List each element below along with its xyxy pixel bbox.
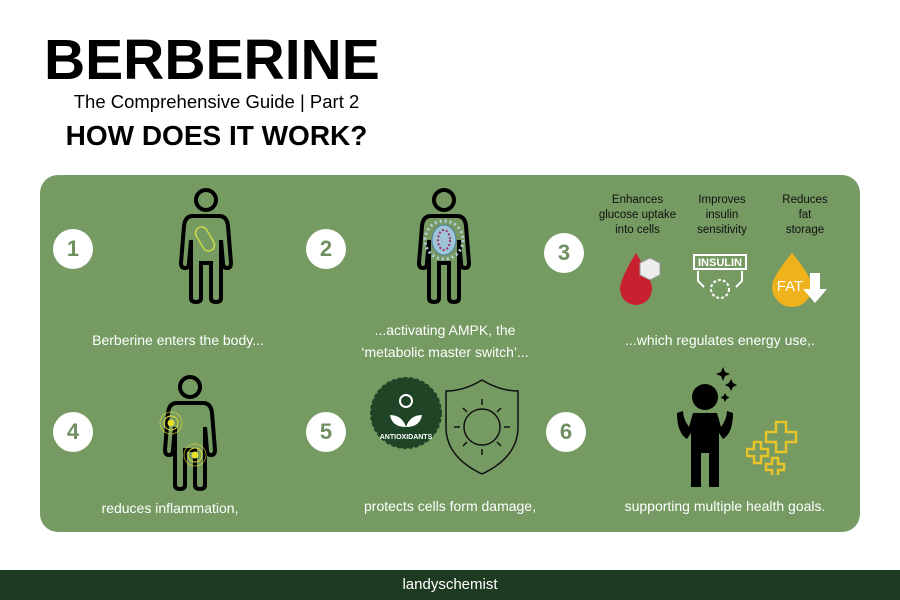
icon: insulin: INSULIN [698,257,742,269]
label: fat: fat [799,209,811,221]
step 6 number [546,412,586,452]
label: glucose [599,194,676,236]
step 6 number: 6 [560,419,572,444]
title: BERBERINE [44,28,380,92]
icon: blood drop with sugar cube [620,253,660,305]
icon: antioxidants badge: ANTIOXIDANTS [380,434,433,441]
label: insulin [697,194,747,236]
label: glucose: Enhances [612,194,663,206]
step 4 text: reduces inflammation, [102,500,238,516]
icon: happy person with sparkles [677,367,737,487]
subtitle: The Comprehensive Guide | Part 2 [74,91,359,112]
step 2 text: ...activating AMPK, the [375,322,515,338]
step 2 number [306,229,346,269]
step 6 text: supporting multiple health goals. [625,498,825,514]
label: fat: Reduces [782,194,828,206]
step 4 number: 4 [67,419,79,444]
icon: yellow crosses [746,420,798,475]
label: insulin: Improves [698,194,746,206]
label: glucose: glucose uptake [599,209,676,221]
step 3 text: ...which regulates energy use,. [625,332,815,348]
label: glucose: into cells [615,224,660,236]
step 4 number [53,412,93,452]
step 1 number [53,229,93,269]
step 5 number: 5 [320,419,332,444]
step 2 text [361,322,529,360]
icon: shield with virus [445,379,519,475]
footer [0,570,900,600]
panel: steps [40,175,860,532]
label: insulin: insulin [706,209,738,221]
icon: fat drop: FAT [777,278,803,295]
step 3 sub-labels [599,194,828,307]
label: fat: storage [786,224,824,236]
step 3 number: 3 [558,240,570,265]
icon: antioxidants badge [370,377,442,449]
heading: HOW DOES IT WORK? [66,120,367,151]
step 5 text: protects cells form damage, [364,498,536,514]
step 3 number [544,233,584,273]
icon: person with pill [179,188,233,304]
icon: person with inflammation [160,375,217,491]
step 5 number [306,412,346,452]
label: insulin: sensitivity [697,224,747,236]
step 2 text: ‘metabolic master switch’... [361,344,529,360]
step 1 number: 1 [67,236,79,261]
step 2 number: 2 [320,236,332,261]
icon: fat drop [772,253,827,307]
label: fat [782,194,828,236]
footer logo: landyschemist [402,576,498,593]
icon: person with AMPK cell [417,188,471,304]
icon: insulin [693,254,747,299]
step 1 text: Berberine enters the body... [92,332,264,348]
